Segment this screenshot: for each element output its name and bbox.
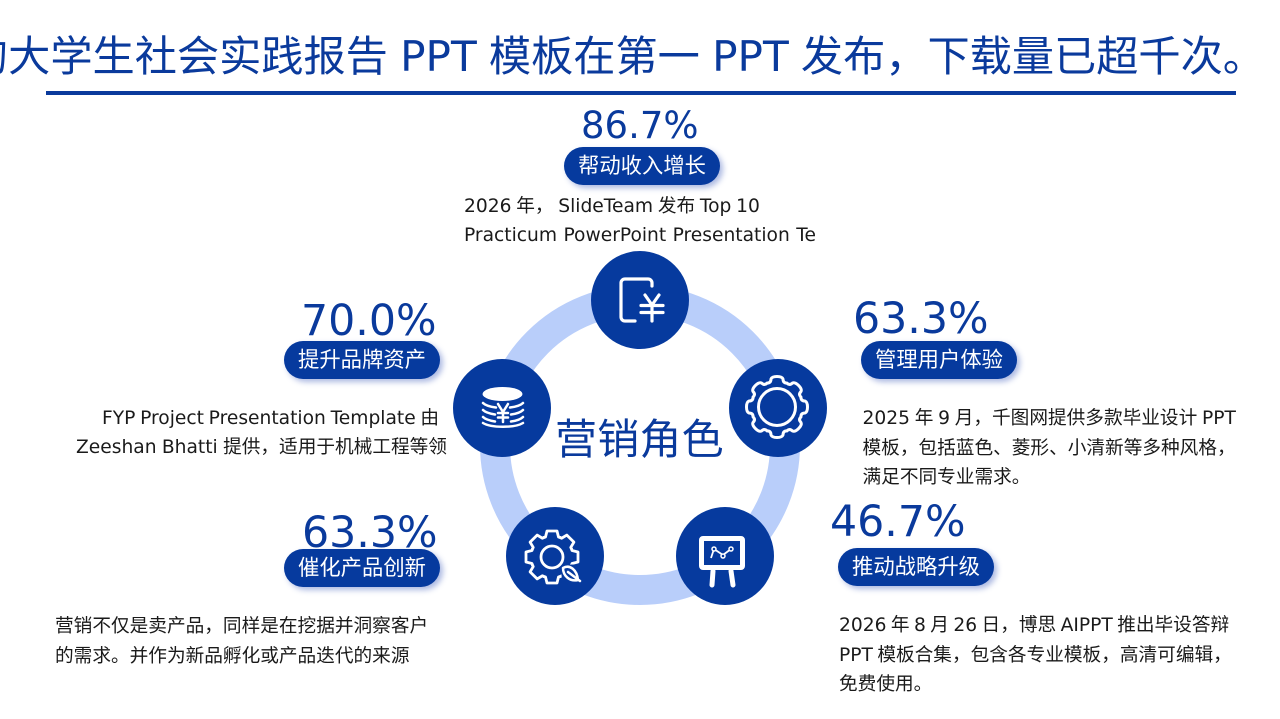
body text: 的需求。并作为新品孵化或产品迭代的来源 [55,646,409,666]
panel: left item [76,296,447,458]
body text: Practicum PowerPoint Presentation Te [464,225,816,246]
percentage 86.7%: 86.7% [581,104,699,147]
body text: 模板，包括蓝色、菱形、小清新等多种风格， [862,438,1236,458]
pill label: 管理用户体验 [875,348,1003,373]
ring [495,300,785,590]
body text [464,196,816,246]
title underline [46,91,1236,95]
title: 的大学生社会实践报告 PPT 模板在第一 PPT 发布，下载量已超千次。 [0,32,1265,81]
icon: wallet with yen [591,251,689,349]
body text [76,408,447,458]
panel: bottom right item [830,497,1232,695]
pill label [284,549,440,587]
percentage 63.3%: 63.3% [853,294,989,344]
icon: coin stack with yen [453,359,551,457]
diagram: ring with five icons [453,251,827,605]
panel: right item [853,294,1236,488]
body text: 2026 年， SlideTeam 发布 Top 10 [464,196,760,217]
body text [55,616,428,666]
body text: 营销不仅是卖产品，同样是在挖据并洞察客户 [55,616,428,637]
panel: bottom left item [55,508,446,666]
body text: FYP Project Presentation Template 由 [102,408,439,429]
icon: presentation board [676,507,774,605]
percentage 70.0%: 70.0% [301,296,437,346]
icon: gear with leaf [506,507,604,605]
pill label [564,147,720,185]
pill label: 推动战略升级 [852,555,980,580]
pill label: 提升品牌资产 [298,348,426,373]
icon: gear [729,359,827,457]
pill label [838,548,994,586]
body text: 免费使用。 [839,674,932,695]
body text: 2025 年 9 月，千图网提供多款毕业设计 PPT [862,408,1236,429]
body text: PPT 模板合集，包含各专业模板，高清可编辑， [839,644,1232,666]
percentage 63.3%: 63.3% [302,508,438,558]
body text [839,614,1232,695]
body text: 满足不同专业需求。 [862,467,1030,488]
pill label: 帮动收入增长 [578,154,706,179]
percentage 46.7%: 46.7% [830,497,966,547]
pill label [861,341,1017,379]
pill label [284,341,440,379]
body text [862,408,1236,488]
pill label: 催化产品创新 [298,556,426,581]
panel: top item [464,104,816,246]
body text: 2026 年 8 月 26 日，博思 AIPPT 推出毕设答辩 [839,615,1229,636]
center label: 营销角色 [555,415,724,464]
